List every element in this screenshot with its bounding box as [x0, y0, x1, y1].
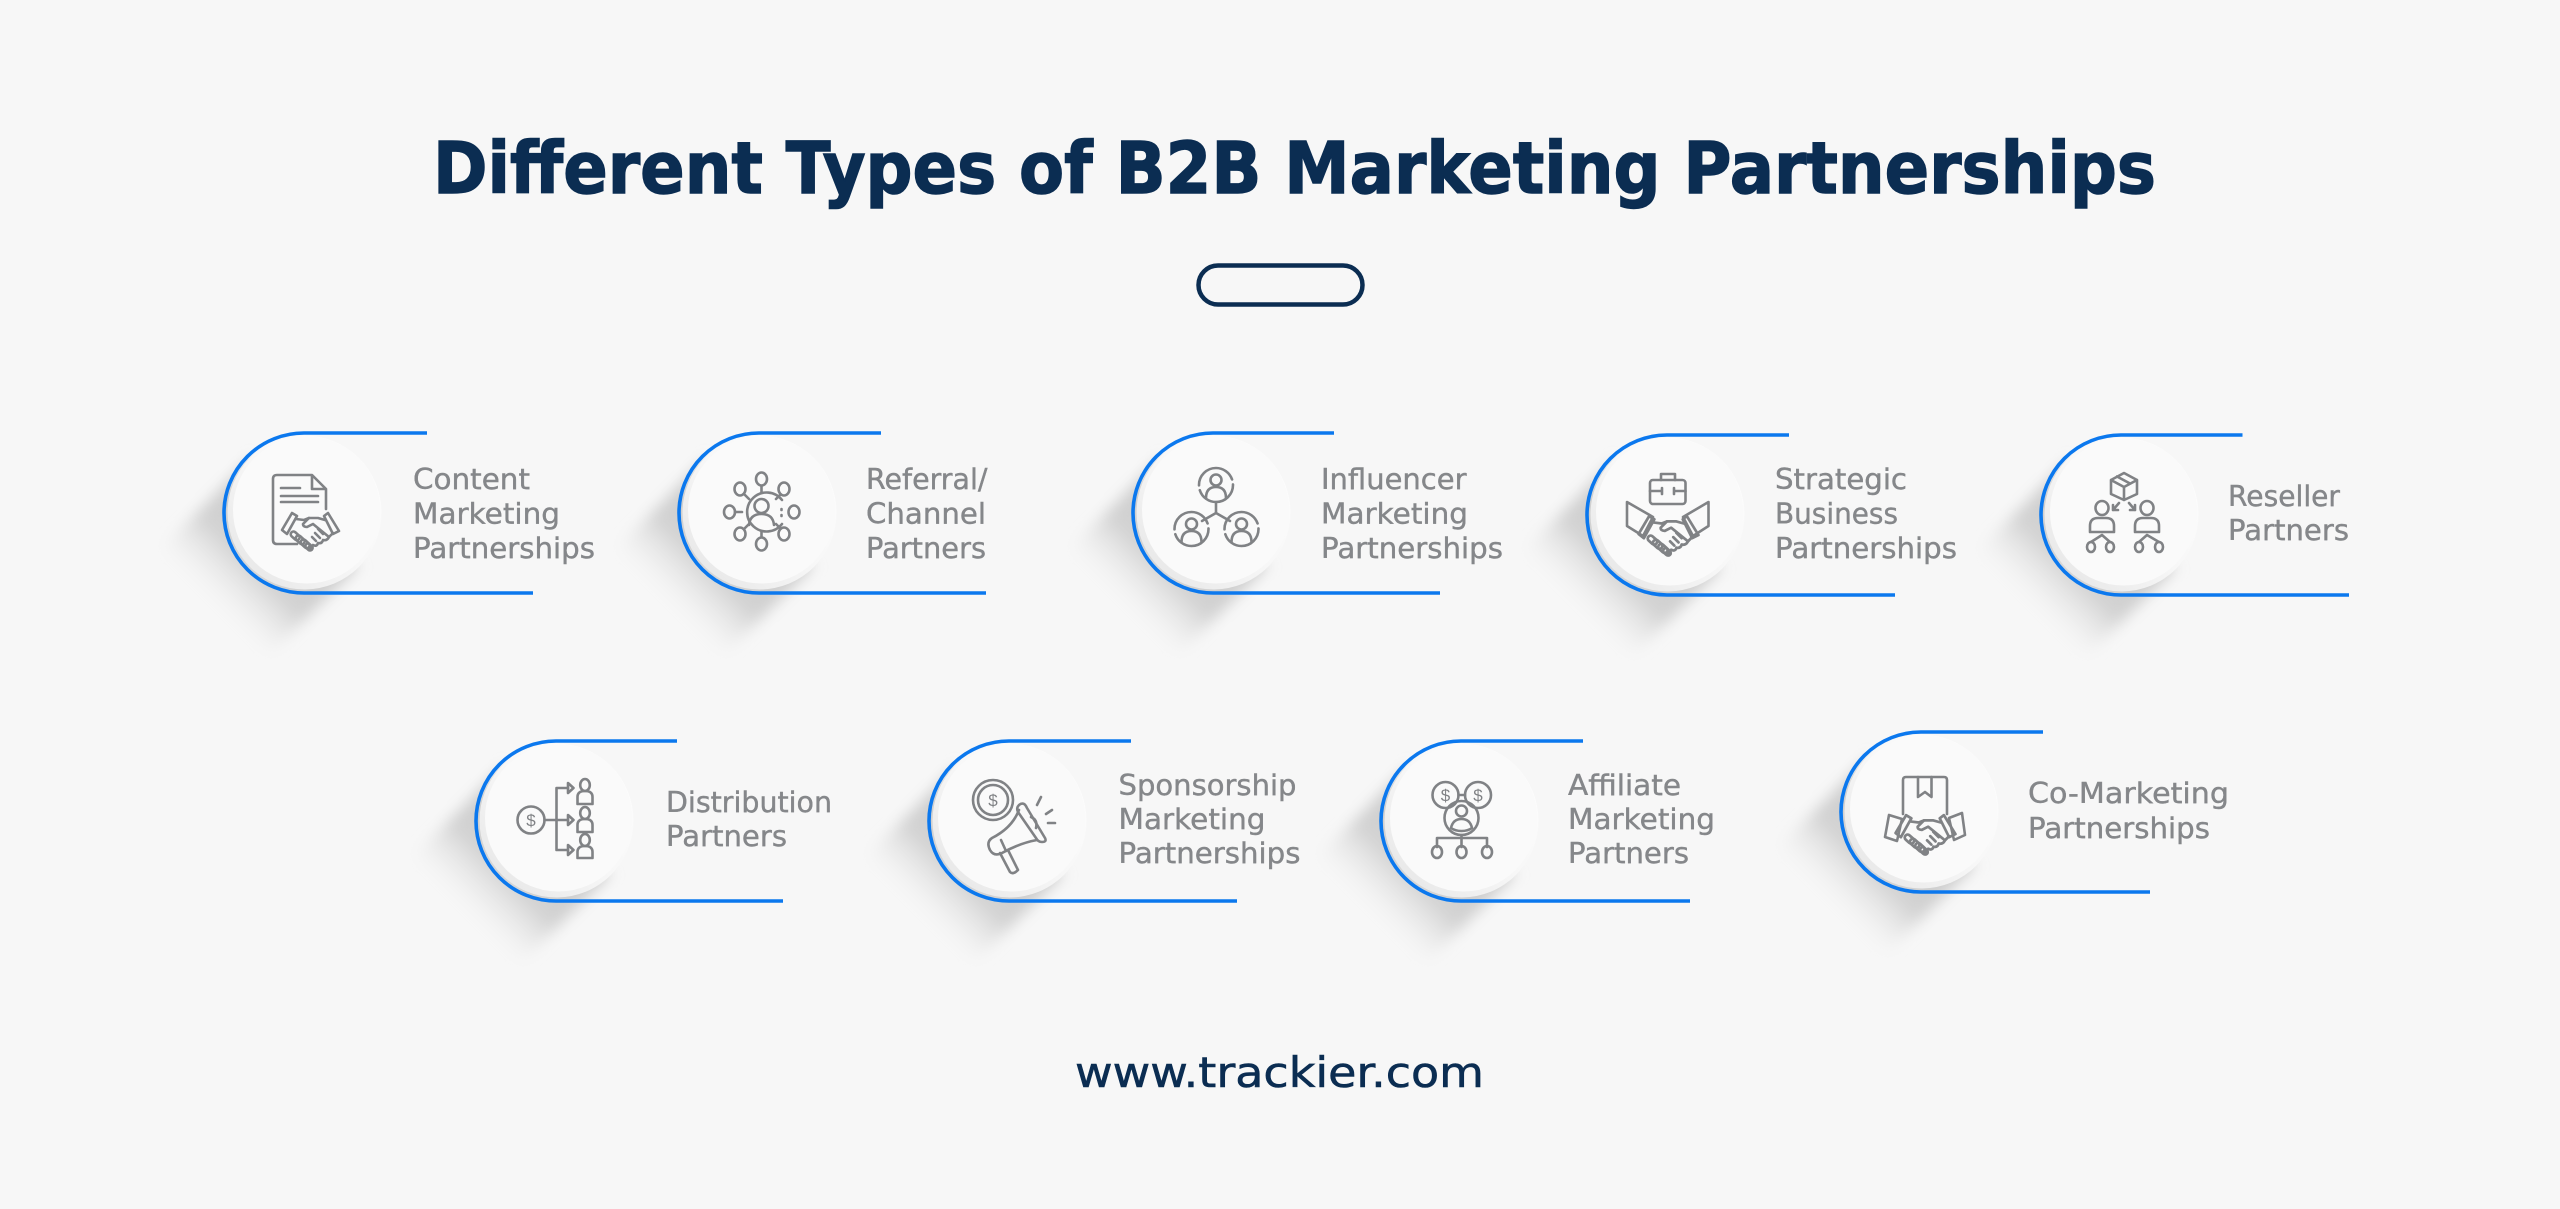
panel: content marketing partnerships: [155, 433, 595, 662]
panel: affiliate marketing partners: [1312, 741, 1715, 970]
icon: money distributed to people: [518, 779, 592, 858]
icon: three connected people: [1174, 468, 1258, 546]
label: distribution partners: Distribution: [666, 786, 832, 819]
label: influencer marketing partnerships: Marketing: [1321, 498, 1468, 530]
icon: affiliate tree: $: [1473, 786, 1483, 805]
label: sponsorship marketing partnerships: [1118, 769, 1300, 870]
icon: contract with handshake: [273, 475, 339, 552]
label: strategic business partnerships: [1775, 463, 1957, 565]
icon: coin and megaphone: $: [988, 791, 998, 810]
label: referral channel partners: Referral/: [866, 463, 988, 496]
icon: package to two resellers: [2087, 473, 2163, 552]
icon: money distributed to people: $: [526, 811, 536, 830]
label: referral channel partners: Partners: [866, 532, 986, 565]
title: Different Types of B2B Marketing Partnerships: [433, 127, 2156, 210]
label: influencer marketing partnerships: Influencer: [1321, 463, 1467, 496]
label: sponsorship marketing partnerships: Partnerships: [1118, 837, 1300, 870]
label: strategic business partnerships: Business: [1775, 498, 1898, 530]
panel: reseller partners: [1972, 435, 2349, 664]
label: distribution partners: [666, 786, 832, 853]
label: reseller partners: [2228, 480, 2349, 547]
label: distribution partners: Partners: [666, 820, 787, 853]
footer website url: www.trackier.com: [1075, 1048, 1484, 1097]
label: affiliate marketing partners: Marketing: [1568, 803, 1715, 836]
label: content marketing partnerships: Content: [413, 463, 530, 496]
panel: referral channel partners: [610, 433, 988, 662]
label: co-marketing partnerships: [2028, 777, 2229, 845]
label: sponsorship marketing partnerships: Marketing: [1118, 803, 1266, 836]
icon: briefcase over handshake: [1627, 474, 1708, 557]
label: affiliate marketing partners: Partners: [1568, 837, 1689, 870]
label: content marketing partnerships: Partnerships: [413, 532, 595, 565]
label: content marketing partnerships: Marketing: [413, 498, 560, 530]
icon: package with handshake: [1885, 777, 1965, 856]
panel: co-marketing partnerships: [1772, 732, 2229, 961]
icon: affiliate tree: $: [1441, 786, 1451, 805]
label: influencer marketing partnerships: [1321, 463, 1503, 565]
icon: network hub: [724, 472, 800, 550]
icon: affiliate tree: [1432, 782, 1492, 858]
icon: coin and megaphone: [973, 780, 1055, 873]
label: referral channel partners: Channel: [866, 498, 986, 530]
label: reseller partners: Partners: [2228, 514, 2349, 547]
title pill ornament: [1198, 266, 1362, 304]
label: reseller partners: Reseller: [2228, 480, 2340, 513]
panel: strategic business partnerships: [1518, 435, 1957, 664]
label: affiliate marketing partners: Affiliate: [1568, 769, 1681, 802]
label: affiliate marketing partners: [1568, 769, 1715, 870]
panel: influencer marketing partnerships: [1064, 433, 1503, 662]
label: co-marketing partnerships: Partnerships: [2028, 812, 2210, 845]
label: co-marketing partnerships: Co-Marketing: [2028, 777, 2229, 810]
label: sponsorship marketing partnerships: Sponsorship: [1118, 769, 1296, 802]
label: strategic business partnerships: Strategic: [1775, 463, 1907, 496]
panel: distribution partners: [407, 741, 832, 970]
panel: sponsorship marketing partnerships: [860, 741, 1300, 970]
label: influencer marketing partnerships: Partnerships: [1321, 532, 1503, 565]
label: content marketing partnerships: [413, 463, 595, 565]
label: strategic business partnerships: Partnerships: [1775, 532, 1957, 565]
label: referral channel partners: [866, 463, 988, 565]
